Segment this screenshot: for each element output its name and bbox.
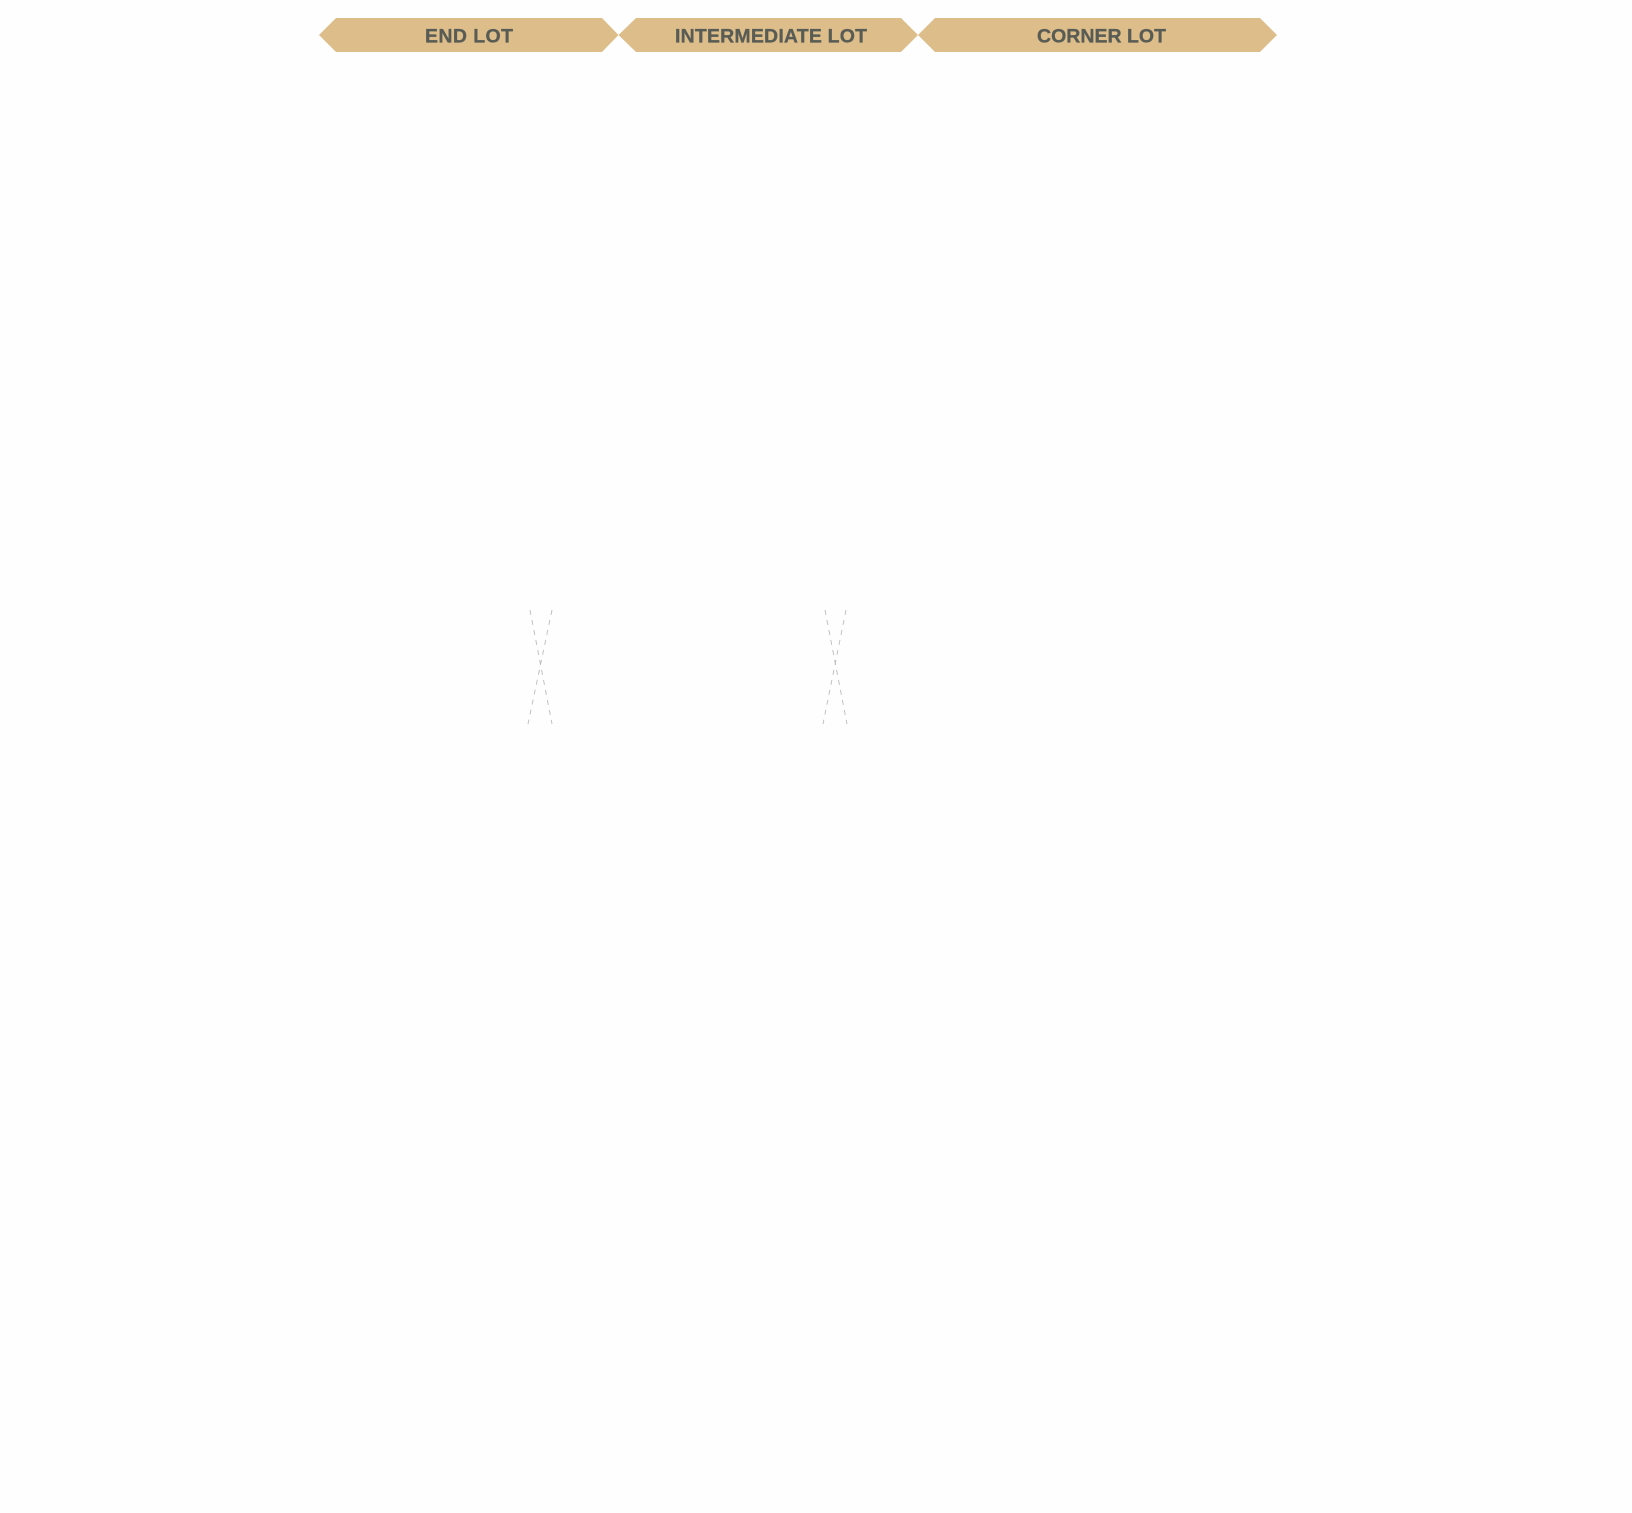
- banner: end lot: END LOT: [425, 25, 513, 47]
- banner: corner lot: [918, 18, 1277, 52]
- banner: intermediate lot: [618, 18, 918, 52]
- banner: intermediate lot: INTERMEDIATE LOT: [675, 25, 867, 47]
- banner: corner lot: CORNER LOT: [1037, 25, 1166, 47]
- dashed cross: intermediate lot to corner lot boundary: [823, 610, 847, 724]
- banner: end lot: [319, 18, 618, 52]
- dashed cross: end lot to intermediate lot boundary: [528, 610, 552, 724]
